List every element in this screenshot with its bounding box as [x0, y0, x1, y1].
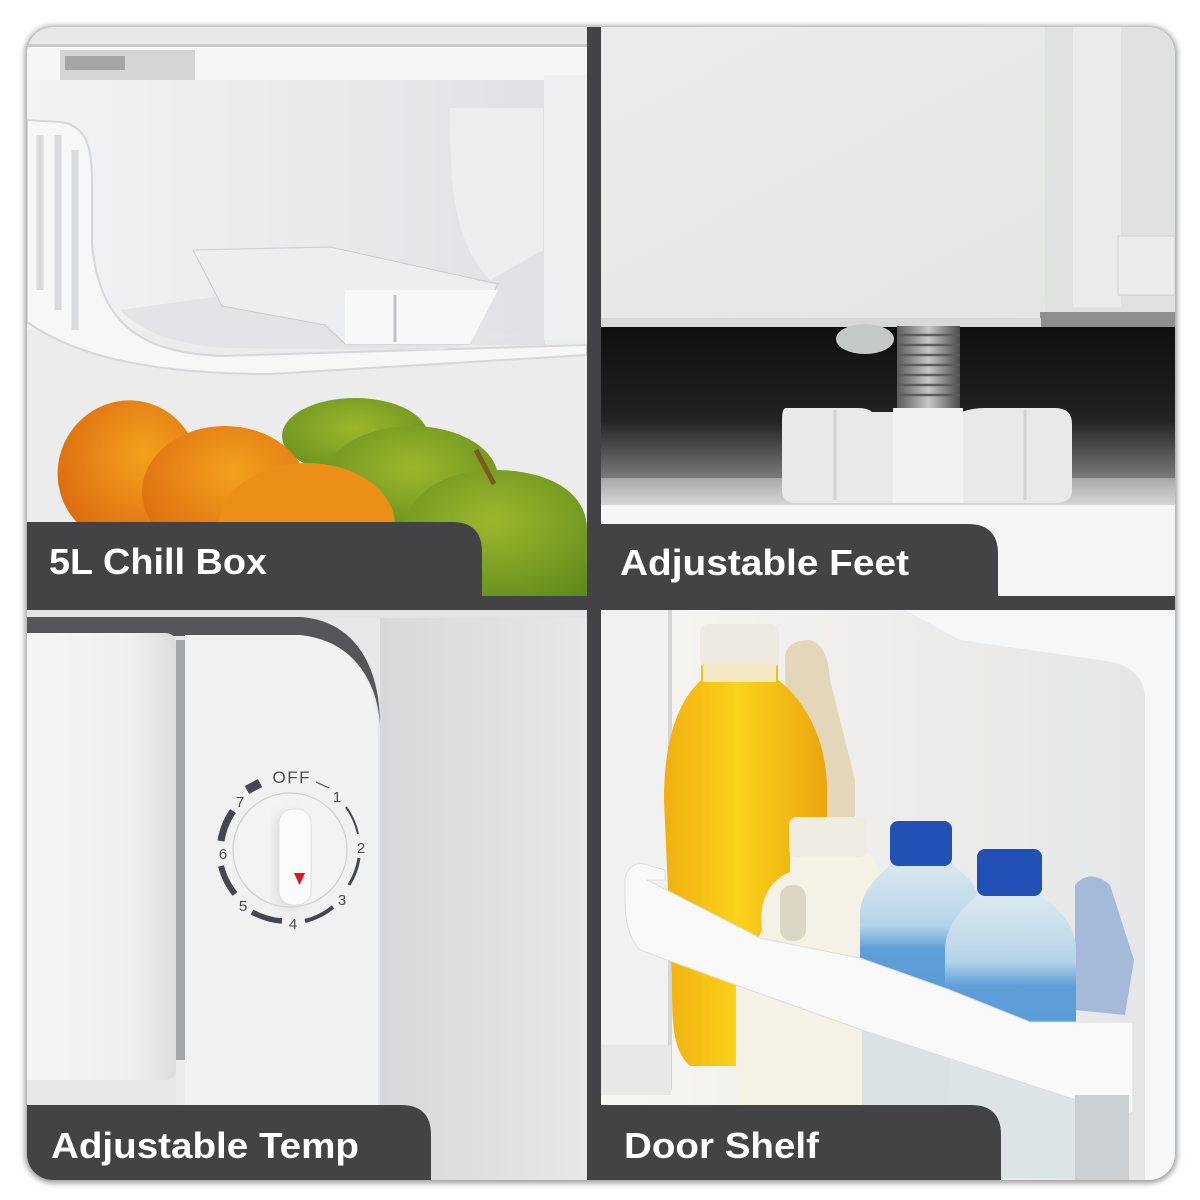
label: Adjustable Feet: Adjustable Feet	[620, 542, 909, 583]
label: 5L Chill Box	[27, 522, 482, 596]
dial numbers: 5	[239, 898, 247, 915]
label: Adjustable Temp	[27, 1105, 431, 1180]
dial numbers: 4	[289, 916, 297, 933]
dial numbers: 6	[219, 846, 227, 863]
panel: adjustable temp	[27, 610, 587, 1180]
dial numbers: 1	[333, 789, 341, 806]
panel: 5L chill box	[27, 27, 587, 596]
icon: levelling foot	[782, 408, 1072, 503]
apple: back	[282, 398, 426, 466]
apple: middle	[336, 426, 497, 522]
bottle shadow	[785, 640, 855, 817]
panel: door shelf	[587, 610, 1175, 1180]
apple: front	[398, 470, 587, 596]
dial knob	[276, 809, 311, 908]
dial numbers: 3	[338, 892, 346, 909]
orange: front	[220, 463, 395, 522]
label: 5L Chill Box: 5L Chill Box	[49, 541, 268, 582]
label: Door Shelf	[587, 1105, 1001, 1180]
label: Adjustable Temp: Adjustable Temp	[51, 1125, 359, 1166]
label: Adjustable Feet	[601, 524, 998, 596]
icon: levelling screw	[897, 326, 960, 408]
orange: left	[58, 400, 188, 522]
panel: adjustable feet	[601, 27, 1175, 596]
milk jug	[737, 817, 888, 1105]
water bottle: front	[945, 849, 1076, 1178]
water bottle: back	[860, 821, 978, 1105]
dial numbers: OFF	[272, 768, 310, 787]
temperature dial	[219, 768, 365, 933]
red pointer	[294, 873, 305, 885]
dial numbers: 2	[357, 840, 365, 857]
dial numbers: 7	[236, 794, 244, 811]
juice bottle	[664, 624, 827, 1066]
door shelf rail	[625, 863, 1133, 1116]
orange: middle	[142, 426, 300, 522]
dial numbers	[219, 768, 365, 933]
label: Door Shelf: Door Shelf	[624, 1125, 820, 1166]
